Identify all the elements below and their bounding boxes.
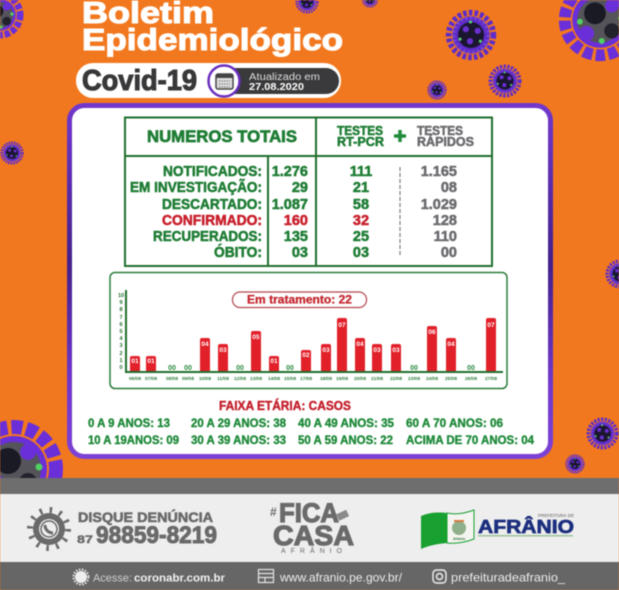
report hotline: 98859-8219 (96, 522, 217, 549)
rt-pcr column: 111 (350, 164, 372, 180)
bar value labels: 00 (168, 365, 176, 372)
table heading: testes rt-pcr: RT-PCR (337, 135, 384, 149)
y axis: 7 (119, 315, 123, 321)
table heading: testes rt-pcr: TESTES (337, 124, 383, 138)
fica em casa logo (270, 498, 354, 555)
bar value labels: 04 (201, 341, 209, 348)
bar value labels: 03 (373, 347, 381, 354)
bar value labels: 06 (428, 329, 436, 336)
totals column: 135 (284, 229, 308, 245)
icon: whatsapp virus (30, 510, 68, 548)
y axis: 4 (119, 336, 123, 342)
date axis labels: 06/08 (129, 376, 141, 382)
prefeitura de afranio logo (421, 510, 574, 549)
bar value labels: 00 (184, 365, 192, 372)
rt-pcr column: 32 (353, 213, 369, 229)
date axis labels (129, 376, 497, 382)
bar value labels: 03 (392, 347, 400, 354)
rapid tests column: 1.165 (421, 164, 457, 180)
bar value labels: 01 (147, 358, 155, 365)
y axis: 3 (119, 343, 123, 349)
date axis labels: 13/08 (250, 376, 262, 382)
main white panel (70, 106, 550, 456)
fica em casa logo: CASA (273, 520, 354, 551)
bars (130, 318, 496, 372)
y axis: 9 (119, 300, 123, 306)
covid-19 date pill: Atualizado em (249, 72, 320, 83)
row labels: EM INVESTIGAÇÃO: (130, 178, 262, 196)
prefeitura de afranio logo: PREFEITURA DE (538, 513, 574, 518)
row labels (130, 164, 262, 261)
prefeitura de afranio logo: AFRÂNIO (478, 516, 574, 537)
icon: instagram (433, 570, 446, 583)
fica em casa logo: AFRÂNIO (281, 546, 343, 555)
bar value labels: 07 (338, 322, 346, 329)
age range cases: 60 A 70 ANOS: 06 (406, 416, 503, 430)
age range cases: 0 A 9 ANOS: 13 (88, 416, 170, 430)
y axis: 0 (119, 365, 123, 371)
footer instagram handle: prefeituradeafranio_ (451, 570, 565, 584)
rt-pcr column: 25 (353, 229, 369, 245)
date axis labels: 14/08 (268, 376, 280, 382)
bar value labels: 07 (487, 322, 495, 329)
footer website: afranio: www.afranio.pe.gov.br/ (279, 570, 403, 584)
covid-19 date pill (76, 63, 341, 98)
bar value labels: 04 (447, 341, 455, 348)
row labels: RECUPERADOS: (153, 229, 262, 245)
rapid tests column: 1.029 (421, 197, 457, 213)
icon: virus sun (74, 570, 88, 584)
date axis labels: 07/08 (145, 376, 157, 382)
report hotline: DISQUE DENÚNCIA (78, 508, 213, 525)
row labels: ÓBITO: (214, 243, 262, 261)
age range cases: ACIMA DE 70 ANOS: 04 (406, 433, 534, 447)
date axis labels: 10/08 (199, 376, 211, 382)
icon: browser window (258, 570, 274, 582)
rapid tests column: 08 (441, 180, 457, 196)
date axis labels: 15/08 (284, 376, 296, 382)
rt-pcr column: 21 (353, 180, 369, 196)
totals column: 1.087 (272, 197, 308, 213)
totals table (125, 117, 492, 266)
date axis labels: 12/08 (234, 376, 246, 382)
covid-19 date pill: Covid-19 (82, 65, 197, 97)
rapid tests column (421, 164, 457, 261)
age range cases (88, 416, 534, 447)
flag: Afrânio (453, 537, 465, 541)
date axis labels: 18/08 (320, 376, 332, 382)
y axis: 8 (119, 307, 123, 313)
rt-pcr column: 03 (353, 245, 369, 261)
table heading: testes rapidos (417, 124, 474, 149)
table heading: testes rt-pcr (337, 124, 384, 149)
date axis labels: 20/08 (354, 376, 366, 382)
bar value labels: 01 (270, 358, 278, 365)
footer website: coronabr: coronabr.com.br (134, 572, 226, 584)
age range cases: 30 A 39 ANOS: 33 (191, 433, 286, 447)
date axis labels: 09/08 (182, 376, 194, 382)
y axis: 6 (119, 322, 123, 328)
y axis: 10 (118, 293, 124, 299)
date axis labels: 23/08 (408, 376, 420, 382)
rt-pcr column (350, 164, 372, 261)
bar value labels: 03 (322, 347, 330, 354)
bar value labels: 02 (302, 352, 310, 359)
y axis (118, 290, 126, 373)
age range heading: FAIXA ETÁRIA: CASOS (219, 398, 351, 413)
table heading: numeros totais: NUMEROS TOTAIS (147, 127, 297, 146)
rapid tests column: 00 (441, 245, 457, 261)
date axis labels: 24/08 (426, 376, 438, 382)
rapid tests column: 110 (434, 229, 457, 245)
bar value labels: 03 (219, 347, 227, 354)
totals column: 03 (292, 245, 308, 261)
title (82, 0, 343, 57)
rapid tests column: 128 (433, 213, 457, 229)
bar value labels (131, 322, 495, 372)
date axis labels: 11/08 (217, 376, 229, 382)
bar value labels: 01 (131, 358, 139, 365)
totals column (272, 164, 308, 261)
table heading: testes rapidos: TESTES (417, 124, 463, 138)
y axis: 5 (119, 329, 123, 335)
date axis labels: 26/08 (465, 376, 477, 382)
date axis labels: 19/08 (336, 376, 348, 382)
bar value labels: 00 (286, 365, 294, 372)
y axis: 1 (119, 358, 123, 364)
footer website: coronabr: Acesse: (93, 572, 132, 584)
bar value labels: 04 (356, 341, 364, 348)
footer background bands (0, 478, 619, 590)
daily cases bar chart (110, 272, 507, 388)
row labels: DESCARTADO: (162, 197, 262, 213)
table heading: testes rapidos: RÁPIDOS (417, 134, 474, 149)
totals column: 29 (292, 180, 308, 196)
age range cases: 50 A 59 ANOS: 22 (298, 433, 393, 447)
date axis labels: 17/08 (300, 376, 312, 382)
bar value labels: 00 (236, 365, 244, 372)
fica em casa logo: FICA (279, 498, 339, 528)
age range cases: 10 A 19ANOS: 09 (88, 433, 179, 447)
title: Epidemiológico (82, 22, 343, 57)
date axis labels: 08/08 (166, 376, 178, 382)
rt-pcr column: 58 (353, 197, 369, 213)
baseline (126, 371, 503, 373)
row labels: NOTIFICADOS: (163, 164, 262, 180)
bar value labels: 05 (252, 334, 260, 341)
date axis labels: 27/08 (485, 376, 497, 382)
date axis labels: 22/08 (390, 376, 402, 382)
row labels: CONFIRMADO: (162, 213, 262, 229)
date axis labels: 25/08 (445, 376, 457, 382)
bar value labels: 00 (410, 365, 418, 372)
footer website: coronabr (74, 570, 226, 584)
flag (421, 510, 474, 549)
age range cases: 20 A 29 ANOS: 38 (191, 416, 286, 430)
bar value labels: 00 (467, 365, 475, 372)
totals column: 1.276 (272, 164, 308, 180)
report hotline: 87 (77, 534, 93, 546)
date axis labels: 21/08 (371, 376, 383, 382)
report hotline (77, 508, 217, 549)
in treatment badge: Em tratamento: 22 (247, 292, 352, 306)
covid-19 date pill: 27.08.2020 (249, 82, 304, 93)
totals column: 160 (284, 213, 308, 229)
age range cases: 40 A 49 ANOS: 35 (298, 416, 394, 430)
plus sign (394, 130, 406, 142)
fica em casa logo: # (270, 505, 277, 519)
y axis: 2 (119, 351, 123, 357)
